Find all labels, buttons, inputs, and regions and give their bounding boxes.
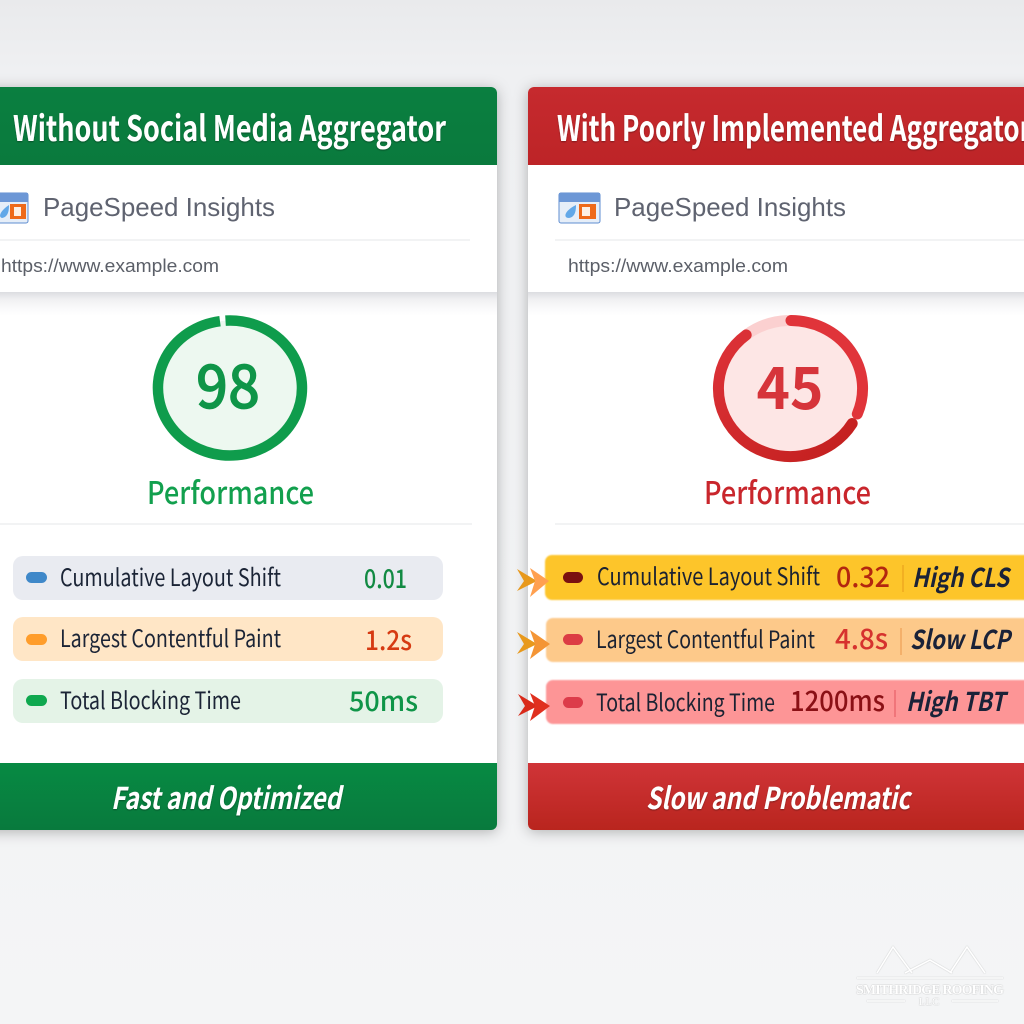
metric: cumulative layout shift left [13,556,443,600]
metric: total blocking time left: 50ms [349,680,418,719]
icon: pagespeed browser right [559,193,600,223]
url: left: https://www.example.com [1,256,219,276]
panel body: left [0,87,497,830]
metric: total blocking time right: 1200ms [790,680,885,720]
arrow: cls [517,568,549,597]
watermark: roofing logo: SMITHRIDGE ROOFING [856,983,1004,998]
metric: cumulative layout shift left: 0.01 [364,559,407,596]
panel body: right [528,87,1024,830]
watermark: roofing logo: LLC [919,996,939,1008]
panel: with poor aggregator [517,87,1024,830]
header: left [0,87,497,165]
metric: largest contentful paint right: Slow LCP [910,620,1013,657]
arrow: tbt [518,693,550,721]
metric: largest contentful paint right [517,618,1024,662]
metric: largest contentful paint left: 1.2s [365,619,412,658]
metric: total blocking time right: Total Blocking Time [596,683,775,718]
url: right: https://www.example.com [568,256,788,276]
metric: cumulative layout shift right: High CLS [912,558,1011,595]
score gauge: 98 [158,320,302,456]
score gauge: 45: 45 [756,342,824,426]
watermark: roofing logo [856,947,1004,1008]
metric: largest contentful paint right: 4.8s [835,618,888,658]
metric: largest contentful paint left [13,617,443,661]
metric: total blocking time left: Total Blocking Time [60,681,241,716]
score label: left: Performance [147,468,314,513]
footer: right: Slow and Problematic [646,774,913,818]
header: right [528,87,1024,165]
icon: pagespeed browser left [0,193,28,223]
panel: without aggregator [0,87,497,830]
header: left: Without Social Media Aggregator [13,101,447,152]
metric: total blocking time right: High TBT [906,682,1009,719]
metric: cumulative layout shift right [517,555,1024,600]
footer: left [0,763,497,830]
metric: cumulative layout shift right: 0.32 [836,556,890,596]
score label: right: Performance [704,468,871,513]
metric: total blocking time right [518,680,1024,724]
footer: right [528,763,1024,830]
footer: left: Fast and Optimized [111,774,344,818]
score gauge: 45 [718,320,863,457]
metric: largest contentful paint left: Largest Contentful Paint [60,619,281,654]
metric: total blocking time left [13,679,443,723]
metric: largest contentful paint right: Largest Contentful Paint [596,620,815,655]
metric: cumulative layout shift left: Cumulative Layout Shift [60,558,281,593]
metric: cumulative layout shift right: Cumulative Layout Shift [597,557,820,592]
brand name: left: PageSpeed Insights [43,192,275,222]
arrow: lcp [517,630,550,659]
brand name: right: PageSpeed Insights [614,192,846,222]
score gauge: 98: 98 [196,339,260,426]
